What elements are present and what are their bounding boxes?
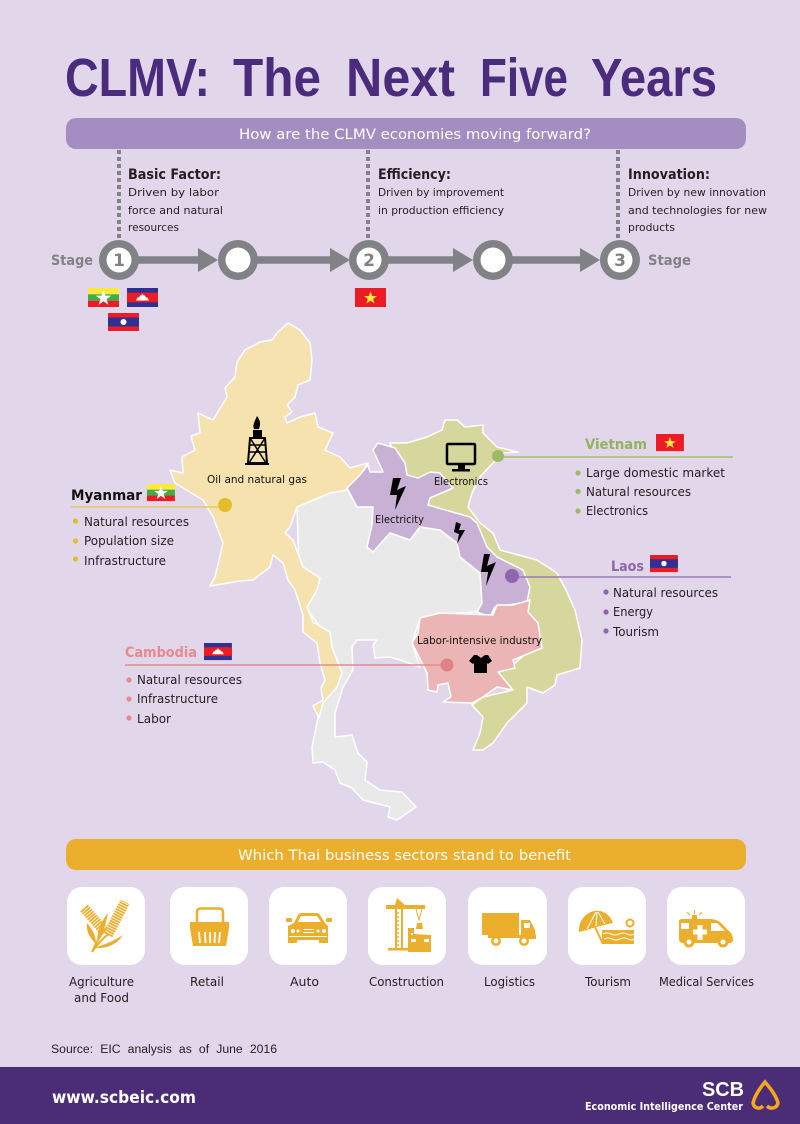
sector: tourism: Tourism: [584, 975, 631, 989]
footer bar: [0, 1067, 800, 1124]
callout: Myanmar: Population size: [84, 534, 174, 548]
footer bar: www.scbeic.com: [52, 1088, 196, 1107]
stage timeline: 1: [113, 251, 125, 271]
sector: agriculture and food: Agriculture: [69, 975, 134, 989]
stage 2 text: efficiency: Efficiency:: [378, 167, 451, 183]
country: Thailand: [297, 489, 482, 820]
stage timeline: 2: [363, 251, 375, 271]
title: Years: [591, 48, 717, 108]
stage 1 text: basic factor: [128, 167, 223, 234]
sector: agriculture and food: [67, 887, 145, 1005]
callout: Laos: [505, 555, 731, 639]
callout: Laos: Tourism: [612, 625, 659, 639]
sector: auto: [269, 887, 347, 989]
stage 2 text: efficiency: Driven by improvement: [378, 186, 505, 199]
stage timeline: 3: [614, 251, 626, 271]
callout: Cambodia: Cambodia: [125, 645, 197, 661]
callout: Vietnam: Electronics: [586, 504, 648, 518]
stage timeline: Stage: [648, 253, 691, 269]
stage 3 text: innovation: Driven by new innovation: [628, 186, 766, 199]
stage 1 text: basic factor: Driven by labor: [128, 186, 219, 199]
banner: how are the CLMV economies moving forward: How are the CLMV economies moving forward?: [239, 127, 591, 143]
country: Myanmar: [170, 323, 368, 718]
sector: medical services: Medical Services: [659, 975, 754, 989]
map label: electronics: Electronics: [434, 476, 488, 488]
callout: Laos: Energy: [613, 605, 653, 619]
sector: tourism: [568, 887, 646, 989]
callout: Cambodia: Labor: [137, 712, 171, 726]
banner: which Thai business sectors stand to benefit: Which Thai business sectors stand to benefit: [238, 848, 572, 864]
banner: which Thai business sectors stand to benefit: [66, 839, 746, 870]
title: Five: [480, 48, 568, 108]
icon: SCB logo: [753, 1082, 778, 1108]
footer bar: Economic Intelligence Center: [585, 1100, 743, 1113]
icon: t-shirt: [469, 655, 492, 673]
stage 3 text: innovation: and technologies for new: [628, 204, 767, 217]
stage 2 text: efficiency: in production efficiency: [378, 204, 504, 217]
country: Cambodia: [412, 600, 542, 703]
callout: Cambodia: Infrastructure: [137, 692, 218, 706]
flags under stage 1: [88, 288, 158, 331]
source note: Source: EIC analysis as of June 2016: [51, 1044, 277, 1056]
sector: agriculture and food: and Food: [74, 991, 129, 1005]
map label: electricity: Electricity: [375, 514, 424, 526]
sector: logistics: Logistics: [484, 975, 535, 989]
stage 3 text: innovation: products: [628, 221, 675, 234]
title: Next: [346, 48, 455, 108]
callout: Myanmar: Natural resources: [84, 515, 189, 529]
stage 1 text: basic factor: Basic Factor:: [128, 167, 221, 183]
sector: logistics: [468, 887, 547, 989]
stage timeline: [51, 150, 691, 280]
callout: Vietnam: Vietnam: [585, 437, 647, 453]
sector: construction: [368, 887, 446, 989]
title: The: [233, 48, 321, 108]
callout: Cambodia: Natural resources: [137, 673, 242, 687]
icon: oil rig: [245, 416, 269, 465]
map label: oil and natural gas: Oil and natural gas: [207, 474, 307, 486]
title: CLMV:: [65, 48, 210, 108]
sector: retail: [170, 887, 248, 989]
icon: monitor: [447, 444, 475, 472]
callout: Myanmar: [71, 484, 232, 568]
stage 3 text: innovation: [628, 167, 767, 234]
callout: Myanmar: Infrastructure: [84, 554, 166, 568]
title: [65, 48, 717, 108]
flag: Vietnam under stage 2: [355, 288, 386, 307]
stage 2 text: efficiency: [378, 167, 505, 217]
callout: Laos: Laos: [611, 559, 644, 575]
callout: Vietnam: Natural resources: [586, 485, 691, 499]
map label: labor-intensive industry: Labor-intensive industry: [417, 635, 542, 647]
callout: Myanmar: Myanmar: [71, 488, 143, 504]
country: Laos: [347, 443, 530, 617]
banner: how are the CLMV economies moving forward: [66, 118, 746, 149]
callout: Vietnam: [492, 434, 733, 518]
footer bar: SCB: [702, 1079, 744, 1101]
sector: auto: Auto: [290, 975, 319, 989]
stage 3 text: innovation: Innovation:: [628, 167, 710, 183]
stage 1 text: basic factor: resources: [128, 221, 179, 234]
callout: Vietnam: Large domestic market: [586, 466, 725, 480]
sector: medical services: [659, 887, 754, 989]
sector: construction: Construction: [369, 975, 444, 989]
stage timeline: Stage: [51, 253, 93, 269]
stage 1 text: basic factor: force and natural: [128, 204, 223, 217]
sector: retail: Retail: [190, 975, 224, 989]
callout: Cambodia: [125, 643, 454, 726]
callout: Laos: Natural resources: [613, 586, 718, 600]
country: Vietnam: [390, 420, 582, 750]
map of mainland southeast asia: [170, 323, 582, 820]
icon: lightning bolts: [390, 478, 496, 586]
